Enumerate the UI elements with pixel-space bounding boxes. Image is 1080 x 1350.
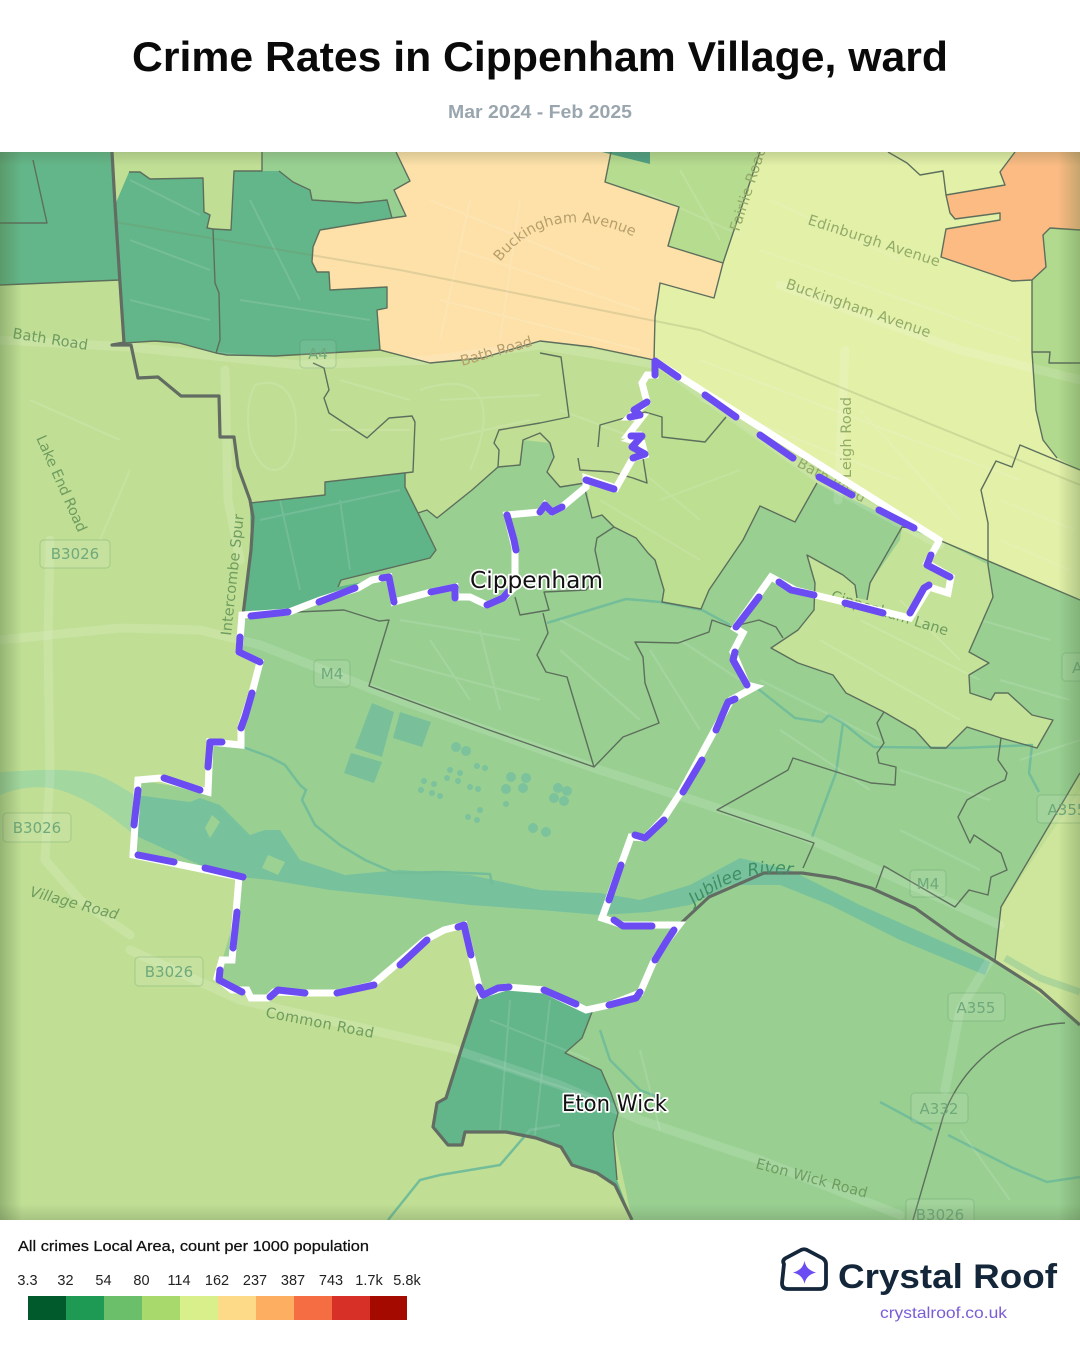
road number signs: B3026: [145, 963, 193, 981]
ward outline: white base: [133, 361, 951, 1010]
legend scale labels: 80: [133, 1273, 150, 1289]
area: pale wedge east: [995, 790, 1080, 1025]
legend scale labels: 162: [205, 1273, 229, 1289]
pale streams on right wedge: [1005, 958, 1080, 992]
road labels: Jubilee River: [689, 860, 794, 910]
wordmark: Crystal Roof: [838, 1258, 1058, 1296]
road labels: Intercombe Spur: [219, 513, 248, 636]
legend scale labels: [17, 1273, 421, 1289]
legend scale labels: 743: [319, 1273, 343, 1289]
place label: Eton Wick: Eton Wick: [562, 1092, 667, 1117]
subtitle: date range: Mar 2024 - Feb 2025: [448, 101, 632, 122]
legend scale labels: 237: [243, 1273, 267, 1289]
title: Crime Rates in Cippenham Village, ward: [132, 33, 948, 80]
road labels: Bath Road: [794, 456, 868, 506]
road labels: Fairlie Road: [728, 145, 770, 233]
road labels: Lake End Road: [32, 433, 89, 535]
legend scale labels: 387: [281, 1273, 305, 1289]
place label: Cippenham: Cippenham: [470, 568, 603, 594]
area: pale yellow-green: [655, 152, 1080, 600]
legend scale labels: 54: [95, 1273, 112, 1289]
road labels: Buckingham Avenue: [784, 277, 933, 341]
legend scale labels: 3.3: [17, 1273, 38, 1289]
area: dark green block D: [243, 473, 436, 615]
map edge shading: [0, 152, 1080, 1220]
road number signs: A355: [957, 999, 995, 1017]
logo: Crystal Roof: [782, 1249, 1058, 1322]
legend title: All crimes Local Area, count per 1000 population: [18, 1239, 369, 1255]
area: Eton Wick dark green: [434, 990, 626, 1205]
legend: [17, 1239, 421, 1320]
road labels: Bath Road: [459, 334, 534, 370]
road labels: Bath Road: [11, 326, 89, 354]
area: cream: [312, 152, 723, 363]
road labels: Edinburgh Avenue: [806, 213, 942, 270]
road labels: Leigh Road: [839, 397, 855, 478]
road labels: Village Road: [28, 884, 121, 924]
area: medium green north-west: [262, 152, 410, 218]
road number signs: B3026: [51, 545, 99, 563]
roads: [0, 170, 1080, 1215]
road number signs: B3026: [13, 819, 61, 837]
streams: [243, 599, 1080, 1220]
website: crystalroof.co.uk: [880, 1305, 1008, 1322]
area: right green strip: [1032, 228, 1080, 470]
thick district boundaries: [112, 152, 1080, 1220]
area: light green east: [771, 527, 1053, 748]
road labels: Cippenham Lane: [829, 589, 950, 640]
base area: light green: [0, 152, 1080, 1220]
road number signs: A332: [920, 1100, 958, 1118]
area: mid green north: [605, 152, 760, 263]
ward and district thin boundaries: [0, 152, 1080, 1220]
road number signs: M4: [917, 875, 939, 893]
legend scale labels: 114: [167, 1273, 191, 1289]
ward outline: purple dashes: [134, 361, 950, 1005]
road labels: Common Road: [264, 1005, 375, 1042]
legend scale labels: 5.8k: [393, 1273, 421, 1289]
river and lakes: [0, 703, 990, 975]
legend colour bar: [28, 1296, 407, 1320]
area: dark green block north-west: [0, 152, 120, 285]
legend scale labels: 32: [57, 1273, 74, 1289]
road labels: Buckingham Avenue: [493, 212, 635, 261]
area: orange: [941, 152, 1080, 281]
road labels: Eton Wick Road: [754, 1156, 869, 1202]
icon: house with star: [782, 1249, 826, 1289]
area: dark green block B: [115, 172, 220, 353]
road number signs: M4: [321, 665, 343, 683]
road number signs: A4: [308, 345, 328, 363]
small dark patch top: [602, 152, 650, 164]
area: light green north of ward: [587, 483, 816, 608]
road number signs: [3, 340, 1080, 1229]
legend scale labels: 1.7k: [355, 1273, 383, 1289]
road labels: [14, 152, 948, 1198]
area: medium green around the ward: [133, 440, 1080, 1220]
area: dark green block C: [213, 171, 392, 356]
road number signs: B3026: [916, 1206, 964, 1224]
